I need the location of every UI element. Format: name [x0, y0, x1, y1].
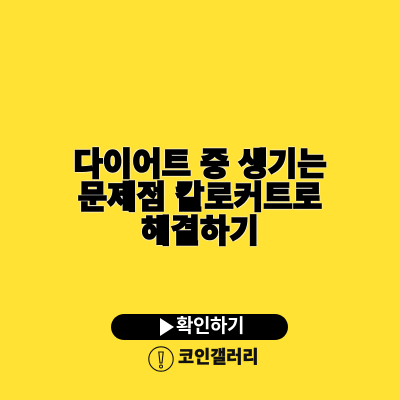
icon: play triangle: [160, 318, 174, 336]
brand: coin gallery: [148, 346, 258, 372]
icon: exclamation circle: [148, 346, 174, 372]
brand name: 코인갤러리: [178, 347, 258, 367]
title: [73, 146, 328, 249]
button: confirm: [111, 314, 288, 340]
title: 다이어트 중 생기는: [73, 146, 327, 182]
title: 해결하기: [141, 213, 259, 249]
title: 문제점 칼로커트로: [78, 179, 322, 215]
button label: 확인하기: [176, 316, 244, 337]
